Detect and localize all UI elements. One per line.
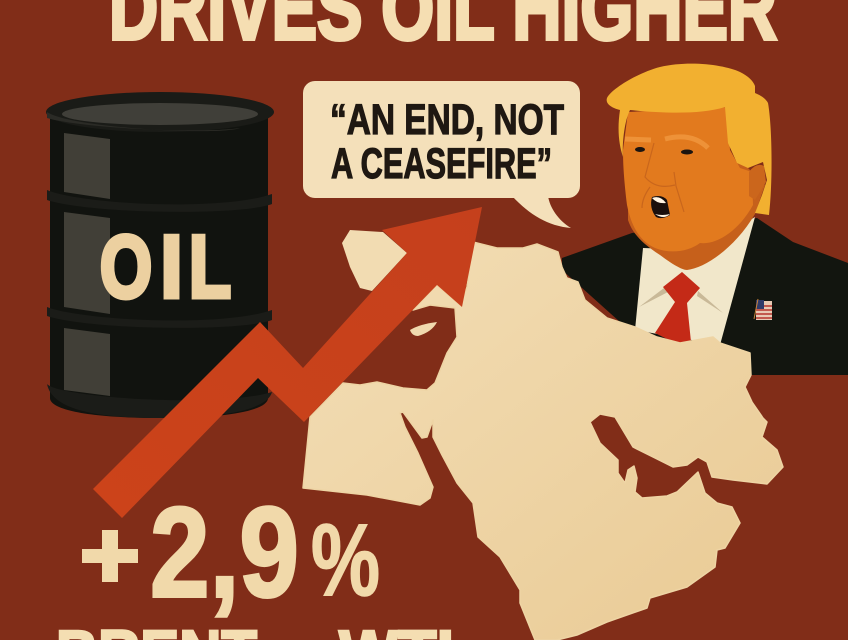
jaw shadow [628, 160, 765, 270]
percentage figure: % [311, 503, 380, 617]
barrel label: I [160, 217, 182, 316]
hair [607, 64, 772, 215]
rising arrow [93, 207, 482, 518]
speech bubble [303, 81, 580, 228]
barrel lid [46, 92, 274, 132]
percentage figure: 2,9 [150, 482, 299, 624]
barrel label [100, 217, 231, 316]
shirt [635, 217, 755, 345]
ear [749, 165, 766, 200]
tie [655, 272, 700, 343]
barrel label: L [189, 217, 231, 316]
nose and creases [642, 143, 684, 212]
face [623, 107, 753, 251]
quote text: “AN END, NOT [330, 96, 564, 144]
jacket [562, 218, 848, 375]
mouth [651, 196, 670, 218]
barrel ribs [47, 190, 272, 212]
collar shadows [639, 288, 723, 313]
map of the Middle East [303, 230, 783, 640]
barrel panel highlights [64, 133, 110, 396]
politician figure [562, 64, 848, 375]
flag pin [754, 299, 772, 320]
eyes [635, 147, 645, 152]
percentage figure [82, 482, 380, 624]
oil barrel [46, 92, 274, 418]
forehead and brows [625, 137, 708, 148]
barrel label: O [100, 217, 152, 316]
speech bubble: A CEASEFIRE” [331, 140, 552, 188]
northern blob [342, 230, 407, 291]
barrel base [47, 384, 272, 418]
sea island [410, 322, 437, 336]
